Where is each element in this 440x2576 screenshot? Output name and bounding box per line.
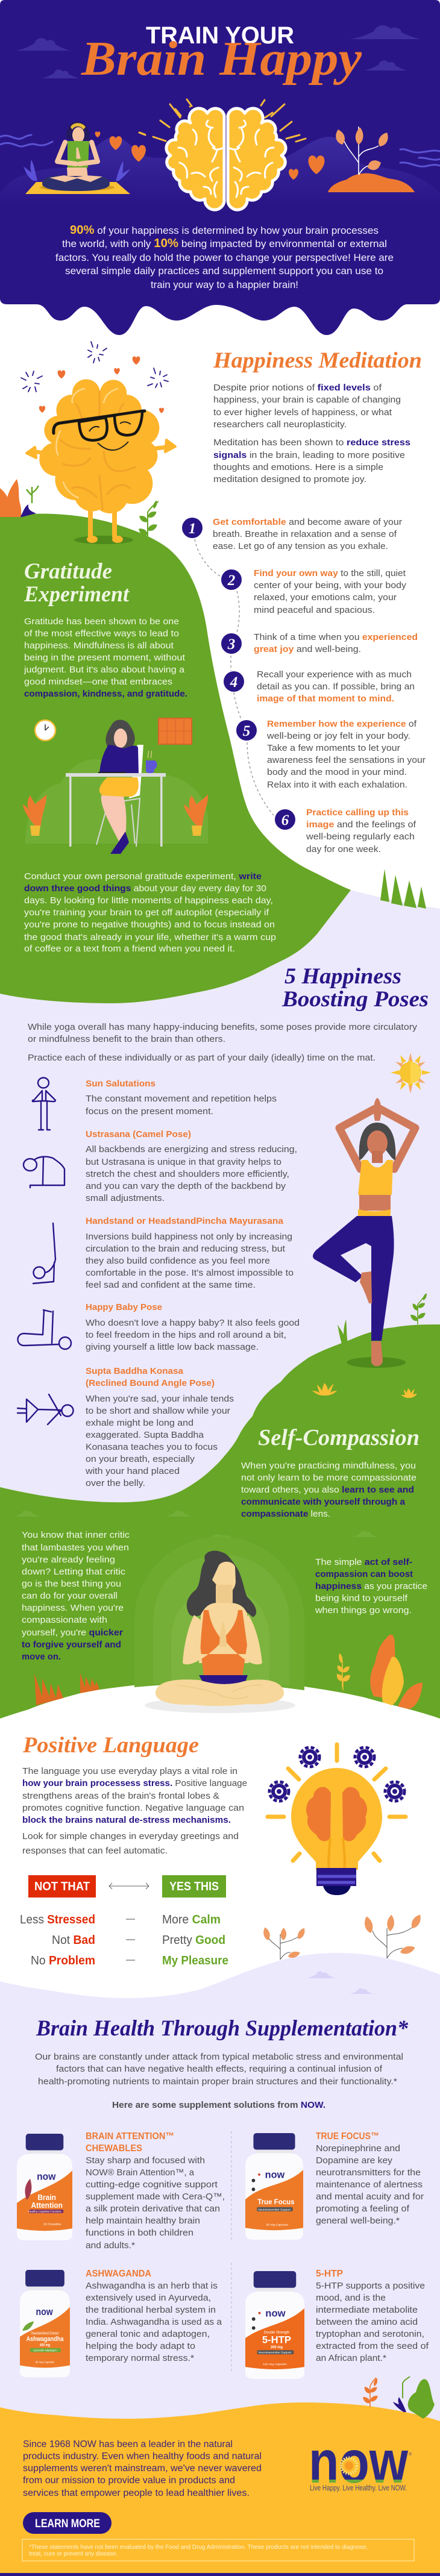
product bottle: Ashwagandha: Ayurvedic Adaptogen bbox=[33, 2349, 57, 2352]
step 4: detail as you can. If possible, bring an bbox=[257, 682, 415, 692]
product bottle: True Focus: Neurotransmitter Support bbox=[258, 2208, 291, 2211]
text: Brain Attention: cutting-edge cognitive support bbox=[86, 2180, 218, 2190]
icon: happy baby pose bbox=[18, 1310, 71, 1349]
text: 5-HTP: 5-HTP supports a positive bbox=[316, 2281, 425, 2291]
illustration: meditating woman with halo bbox=[134, 1537, 304, 1713]
pose: Sun Salutations: focus on the present moment. bbox=[86, 1106, 213, 1117]
text: inner critic: can do for your overall bbox=[22, 1591, 118, 1601]
heading: 5 Happiness Boosting Poses: Boosting Poses bbox=[281, 987, 429, 1012]
product bottle: 5-HTP: 120 Veg Capsules bbox=[263, 2363, 287, 2366]
text: Brain Attention: supplement made with Cera-Q™, bbox=[86, 2192, 225, 2202]
dividers bbox=[231, 2131, 232, 2373]
text: meditation intro: researchers call neuroplasticity. bbox=[213, 419, 347, 430]
heading: Gratitude Experiment bbox=[24, 559, 130, 607]
table: phrase swaps: My Pleasure bbox=[162, 1954, 228, 1967]
text: NOW company description: from our mission to provide value in products and bbox=[23, 2475, 235, 2486]
text: True Focus bbox=[316, 2131, 424, 2226]
pose: Supta Baddha Konasa: Supta Baddha Konasa bbox=[86, 1366, 184, 1376]
icon: camel pose bbox=[24, 1157, 64, 1188]
text: inner critic: down? Letting that critic bbox=[22, 1567, 126, 1577]
label: NOT THAT bbox=[28, 1875, 96, 1898]
panel: footer yellow background bbox=[0, 2402, 440, 2573]
step 3: 3 bbox=[227, 636, 235, 653]
text: supplementation intro: Here are some supplement solutions from NOW. bbox=[112, 2100, 325, 2110]
heading: Self-Compassion: Self-Compassion bbox=[258, 1425, 420, 1450]
heading: Positive Language: Positive Language bbox=[22, 1733, 199, 1758]
step 6: well-being regularly each bbox=[306, 832, 415, 842]
text: True Focus: Norepinephrine and bbox=[316, 2143, 400, 2154]
text: positive language body: promotes cognitive function. Negative language can bbox=[22, 1803, 244, 1813]
text: gratitude intro bbox=[24, 616, 187, 699]
product bottle: Ashwagandha: 450 mg bbox=[40, 2343, 50, 2348]
text: gratitude experiment: you're training your brain to get off autopilot (especially if bbox=[24, 907, 269, 918]
table: phrase swaps: Less Stressed bbox=[20, 1913, 95, 1926]
intro text: train your way to a happier brain! bbox=[151, 279, 298, 290]
product bottle: True Focus bbox=[245, 2133, 303, 2240]
step 6: day for one week. bbox=[306, 844, 381, 854]
step 2: mind peaceful and spacious. bbox=[254, 605, 375, 615]
step 3 bbox=[221, 632, 418, 654]
heading: Gratitude Experiment: Gratitude bbox=[24, 559, 112, 584]
step 5: Take a few moments to let your bbox=[267, 743, 400, 753]
heading: 5 Happiness Boosting Poses: 5 Happiness bbox=[284, 964, 401, 989]
pose: Supta Baddha Konasa: When you're sad, your inhale tends bbox=[86, 1394, 234, 1404]
product bottle: True Focus: now bbox=[265, 2170, 284, 2181]
pose: Happy Baby: giving yourself a little low back massage. bbox=[86, 1342, 259, 1352]
text: meditation intro: thoughts and emotions. Here is a simple bbox=[213, 462, 383, 472]
product bottle: Brain Attention: 60 Chewables bbox=[43, 2222, 61, 2226]
text: True Focus: and mental acuity and for bbox=[316, 2192, 424, 2202]
text: gratitude experiment: the good that's already in your life, whether it's a warm cup bbox=[24, 932, 276, 942]
product bottle: 5-HTP bbox=[245, 2271, 304, 2379]
text: inner critic: compassionate with bbox=[22, 1615, 107, 1625]
text: NOW company description: supplements weren't mainstream, we've never wavered bbox=[23, 2463, 262, 2474]
intro text: 90% of your happiness is determined by how your brain processes bbox=[70, 224, 379, 237]
text: yoga intro: or mindfulness benefit to the brain than others. bbox=[28, 1034, 225, 1044]
text: gratitude experiment: Conduct your own personal gratitude experiment, write bbox=[24, 871, 262, 882]
text: inner critic: to forgive yourself and bbox=[22, 1640, 121, 1650]
text: gratitude experiment: days. By looking for little moments of happiness each day, bbox=[24, 895, 273, 906]
text: gratitude intro: compassion, kindness, and gratitude. bbox=[24, 689, 187, 699]
text: act of self-compassion: being kind to yourself bbox=[315, 1593, 408, 1603]
step 1: breath. Breathe in relaxation and a sense of bbox=[213, 529, 397, 539]
product bottle: Ashwagandha: Standardized Extract bbox=[31, 2332, 59, 2336]
text: supplementation intro: health-promoting nutrients to maintain proper brain structures and their functionality.* bbox=[38, 2076, 397, 2087]
text: meditation intro: to ever higher levels of happiness, or what bbox=[213, 407, 392, 418]
text: Ashwaganda: extensively used in Ayurveda, bbox=[86, 2293, 211, 2303]
pose: Sun Salutations: The constant movement and repetition helps bbox=[86, 1094, 277, 1104]
text: 5-HTP: extracted from the seed of bbox=[316, 2341, 429, 2351]
icon: standing prayer pose bbox=[33, 1077, 55, 1130]
step 5: awareness feel the sensations in your bbox=[267, 755, 426, 765]
text: self-compassion intro: not only learn to be more compassionate bbox=[241, 1473, 416, 1483]
product bottle: 5-HTP: Neurotransmitter Support bbox=[259, 2351, 292, 2355]
step 2 bbox=[221, 568, 407, 615]
intro text: several simple daily practices and supplement support you can use to bbox=[65, 265, 383, 277]
text: gratitude intro: judgment. But it's also about having a bbox=[24, 665, 185, 675]
text: self-compassion intro bbox=[241, 1461, 416, 1519]
icon: hearts in header bbox=[95, 131, 324, 180]
text: Ashwaganda: the traditional herbal system in bbox=[86, 2305, 216, 2315]
text: gratitude intro: being in the present moment, without bbox=[24, 653, 186, 663]
disclaimer box: treat, cure or prevent any disease. bbox=[29, 2550, 118, 2557]
text: yoga intro: Practice each of these individually or as part of your daily (ideally) time on the mat. bbox=[28, 1053, 376, 1063]
arrow: double arrow bbox=[109, 1883, 149, 1889]
text: act of self-compassion: when things go wrong. bbox=[315, 1605, 412, 1615]
label: YES THIS bbox=[162, 1875, 226, 1898]
product bottle: Brain Attention bbox=[17, 2134, 72, 2240]
step 6: Practice calling up this bbox=[306, 807, 409, 818]
text: Brain Attention bbox=[86, 2131, 225, 2251]
heading: Happiness Meditation: Happiness Meditation bbox=[213, 348, 422, 373]
product bottle: 5-HTP: Double Strength bbox=[264, 2331, 289, 2334]
text: yoga intro: While yoga overall has many happy-inducing benefits, some poses provide more circulatory bbox=[28, 1022, 418, 1032]
text: gratitude experiment: of coffee or a text from a friend when you need it. bbox=[24, 944, 235, 954]
text: inner critic: that lambastes you when bbox=[22, 1543, 129, 1553]
text: meditation intro: Meditation has been shown to reduce stress bbox=[213, 437, 410, 448]
pose: Happy Baby: Who doesn't love a happy baby? It also feels good bbox=[86, 1318, 300, 1328]
icon: autumn leaves right bbox=[335, 1635, 423, 1709]
text: Ashwaganda: general tonic and adaptogen, bbox=[86, 2329, 210, 2339]
text: inner critic: You know that inner critic bbox=[22, 1530, 130, 1540]
icon: plants around brain character bbox=[0, 479, 159, 537]
step 6: 6 bbox=[281, 812, 289, 829]
icon: smiling brain character bbox=[21, 342, 175, 544]
product bottle: True Focus: True Focus bbox=[257, 2198, 295, 2206]
pose: Happy Baby: Happy Baby Pose bbox=[86, 1302, 162, 1312]
pose: Handstand: feel sad and confident at the same time. bbox=[86, 1280, 256, 1290]
heading: Gratitude Experiment: Experiment bbox=[24, 582, 130, 607]
text: True Focus: promoting a feeling of bbox=[316, 2204, 410, 2214]
text: meditation intro: signals in the brain, leading to more positive bbox=[213, 450, 405, 460]
text: Ashwaganda: Ashwagandha is an herb that is bbox=[86, 2281, 218, 2291]
pose: Ustrasana bbox=[86, 1129, 297, 1203]
text: meditation intro: happiness, your brain is capable of changing bbox=[213, 395, 401, 405]
text: Brain Attention: BRAIN ATTENTION™ bbox=[86, 2131, 174, 2142]
product bottle: Brain Attention: Healthy Cognitive Function bbox=[28, 2210, 61, 2214]
text: positive language body: responses that can feel automatic. bbox=[22, 1846, 168, 1856]
pose: Ustrasana: stretch the chest and shoulders more efficiently, bbox=[86, 1169, 289, 1179]
step 3: Think of a time when you experienced bbox=[254, 632, 418, 642]
text: Brain Attention: a silk protein derivative that can bbox=[86, 2204, 220, 2214]
icon: yellow flowers bbox=[312, 1383, 417, 1398]
text: supplementation intro: Our brains are constantly under attack from typical metabolic stress and environmental bbox=[35, 2052, 403, 2062]
text: gratitude intro: of the most effective ways to lead to bbox=[24, 628, 179, 639]
step 6: image and the feelings of bbox=[306, 819, 416, 830]
text: yoga intro bbox=[28, 1022, 418, 1063]
disclaimer box bbox=[22, 2539, 414, 2561]
intro text: the world, with only 10% being impacted by environmental or external bbox=[62, 237, 387, 250]
logo: NOW: ® bbox=[409, 2452, 412, 2457]
dashed connector between steps bbox=[195, 539, 274, 815]
text: True Focus: neurotransmitters for the bbox=[316, 2167, 421, 2178]
footer strip bbox=[0, 2573, 440, 2576]
text: act of self-compassion bbox=[315, 1557, 427, 1615]
text: meditation intro: meditation designed to promote joy. bbox=[213, 474, 366, 484]
pose: Supta Baddha Konasa: exaggerated. Supta Baddha bbox=[86, 1430, 204, 1440]
panel: self-compassion green hill bbox=[0, 1324, 440, 1719]
text: 5-HTP: tryptophan and serotonin, bbox=[316, 2329, 424, 2339]
icon: green trees bbox=[380, 869, 426, 909]
pose: Supta Baddha Konasa: to be short and shallow while your bbox=[86, 1406, 230, 1416]
text: meditation intro: Despite prior notions of fixed levels of bbox=[213, 383, 382, 393]
step 1: Get comfortable and become aware of your bbox=[213, 517, 402, 527]
text: gratitude intro: good mindset—one that embraces bbox=[24, 677, 172, 687]
text: Brain Attention: Stay sharp and focused with bbox=[86, 2155, 205, 2166]
title: TRAIN YOUR bbox=[146, 22, 294, 49]
pose: Supta Baddha Konasa: with your hand placed bbox=[85, 1466, 180, 1476]
text: positive language body: how your brain processess stress. Positive language bbox=[22, 1778, 247, 1788]
text: inner critic: you're already feeling bbox=[22, 1555, 115, 1565]
pose: Happy Baby: to feel freedom in the hips and roll around a bit, bbox=[86, 1330, 286, 1340]
text: positive language body: Look for simple changes in everyday greetings and bbox=[22, 1831, 239, 1841]
icon: sun bbox=[391, 1053, 431, 1094]
pose: Handstand: they also build confidence as you feel more bbox=[86, 1256, 270, 1266]
step 3: great joy and well-being. bbox=[254, 644, 361, 654]
text: True Focus: TRUE FOCUS™ bbox=[316, 2131, 379, 2142]
step 5: body and the mood in your mind. bbox=[267, 767, 407, 777]
label: YES THIS: YES THIS bbox=[169, 1880, 219, 1893]
icon: reclined bound angle pose bbox=[17, 1394, 74, 1424]
text: Ashwaganda bbox=[86, 2269, 222, 2363]
text: NOW company description: services that empower people to lead healthier lives. bbox=[23, 2488, 250, 2498]
icon: lightbulb with brain and gears bbox=[268, 1744, 406, 1895]
table: phrase swaps bbox=[20, 1913, 228, 1967]
disclaimer box: *These statements have not been evaluated by the Food and Drug Administration. These products are not intended to diagnose, bbox=[29, 2543, 368, 2551]
logo: NOW: Live Happy. Live Healthy. Live NOW. bbox=[310, 2483, 407, 2492]
step 5: well-being or joy felt in your body. bbox=[266, 731, 410, 741]
logo: NOW: now bbox=[309, 2428, 408, 2496]
pose: Sun Salutations bbox=[86, 1079, 277, 1117]
text: meditation intro bbox=[213, 383, 410, 484]
pose: Handstand: Inversions build happiness not only by increasing bbox=[86, 1232, 292, 1242]
text: 5-HTP: mood, and is the bbox=[316, 2293, 386, 2303]
text: True Focus: Dopamine are key bbox=[316, 2155, 393, 2166]
product bottle: Brain Attention: Attention bbox=[31, 2201, 63, 2210]
illustration: woman writing at desk bbox=[23, 718, 208, 854]
text: Ashwaganda: ASHWAGANDA bbox=[86, 2269, 151, 2279]
text: self-compassion intro: toward others, you also learn to see and bbox=[241, 1485, 414, 1495]
text: 5-HTP: intermediate metabolite bbox=[316, 2305, 418, 2315]
product bottle: Ashwagandha: Ashwagandha bbox=[27, 2336, 64, 2343]
step 2: Find your own way to the still, quiet bbox=[254, 568, 406, 578]
text: act of self-compassion: happiness as you practice bbox=[315, 1581, 427, 1591]
step 4 bbox=[224, 669, 415, 704]
text: gratitude intro: happiness. Mindfulness is all about bbox=[24, 641, 174, 651]
text: Brain Attention: NOW® Brain Attention™, a bbox=[86, 2167, 195, 2178]
text: Ashwaganda: temporary normal stress.* bbox=[86, 2353, 194, 2363]
text: gratitude intro: Gratitude has been shown to be one bbox=[24, 616, 179, 627]
panel: header background bbox=[0, 0, 440, 335]
text: positive language body: strengthens areas of the brain's frontal lobes & bbox=[22, 1791, 219, 1801]
text: positive language body: block the brains natural de-stress mechanisms. bbox=[22, 1815, 231, 1825]
icon: meditating woman on mat bbox=[24, 122, 131, 194]
text: gratitude experiment: down three good things about your day every day for 30 bbox=[24, 883, 266, 894]
table: phrase swaps: No Problem bbox=[31, 1954, 95, 1967]
text: 5-HTP bbox=[316, 2269, 429, 2363]
step 5: 5 bbox=[243, 723, 250, 739]
pose: Supta Baddha Konasa: on your breath, especially bbox=[86, 1454, 195, 1464]
step 1: 1 bbox=[189, 521, 196, 537]
text: act of self-compassion: The simple act of self- bbox=[315, 1557, 412, 1567]
product bottle: Ashwagandha: now bbox=[36, 2307, 54, 2318]
pose: Ustrasana: Ustrasana (Camel Pose) bbox=[86, 1129, 191, 1139]
icon: handstand pose bbox=[33, 1223, 55, 1283]
text: Ashwaganda: helping the body adapt to bbox=[86, 2341, 195, 2351]
illustration: woman in tree pose bbox=[312, 1098, 428, 1395]
pose: Supta Baddha Konasa: (Reclined Bound Angle Pose) bbox=[86, 1378, 215, 1388]
step 2: 2 bbox=[227, 572, 235, 589]
text: 5-HTP: between the amino acid bbox=[316, 2317, 418, 2327]
product bottle: True Focus: 90 Veg Capsules bbox=[266, 2223, 288, 2227]
step 5: Remember how the experience of bbox=[267, 719, 417, 729]
text: inner critic bbox=[22, 1530, 130, 1662]
pose: Handstand: circulation to the brain and reducing stress, but bbox=[86, 1244, 286, 1254]
step 1: ease. Let go of any tension as you exhale. bbox=[213, 541, 388, 551]
text: NOW company description: Since 1968 NOW has been a leader in the natural bbox=[23, 2439, 233, 2449]
text: supplementation intro: factors that can have negative health effects, requiring a continual infusion of bbox=[56, 2064, 383, 2074]
text: 5-HTP: an African plant.* bbox=[316, 2353, 386, 2363]
product bottle: Brain Attention: now bbox=[37, 2171, 56, 2183]
text: self-compassion intro: compassionate lens. bbox=[241, 1509, 330, 1519]
button: learn more: LEARN MORE bbox=[35, 2518, 100, 2530]
button: learn more bbox=[23, 2512, 112, 2534]
step 6 bbox=[275, 807, 416, 854]
intro text: factors. You really do hold the power to change your perspective! Here are bbox=[55, 252, 394, 263]
intro text bbox=[55, 224, 394, 290]
pose: Handstand: comfortable in the pose. It's almost impossible to bbox=[86, 1268, 294, 1278]
heading: 5 Happiness Boosting Poses bbox=[281, 964, 429, 1012]
text: True Focus: maintenance of alertness bbox=[316, 2180, 423, 2190]
text: Brain Attention: CHEWABLES bbox=[86, 2143, 142, 2154]
pose: Handstand bbox=[86, 1216, 294, 1290]
text: NOW company description bbox=[23, 2439, 262, 2498]
table: phrase swaps: Not Bad bbox=[52, 1934, 95, 1947]
pose: Sun Salutations: Sun Salutations bbox=[86, 1079, 156, 1089]
text: inner critic: move on. bbox=[22, 1652, 61, 1662]
icon: plant on mound bbox=[328, 127, 415, 192]
text: act of self-compassion: compassion can boost bbox=[315, 1569, 413, 1579]
pose: Ustrasana: and you can vary the depth of the backbend by bbox=[86, 1181, 286, 1191]
panel: supplement lavender background bbox=[0, 1953, 440, 2422]
text: inner critic: go is the best thing you bbox=[22, 1579, 121, 1589]
pose: Supta Baddha Konasa: over the belly. bbox=[86, 1478, 145, 1488]
text: 5-HTP: 5-HTP bbox=[316, 2269, 343, 2279]
step 5: Relax into it with each exhalation. bbox=[267, 780, 407, 790]
pose: Handstand: Handstand or HeadstandPincha Mayurasana bbox=[86, 1216, 284, 1226]
table: phrase swaps: Pretty Good bbox=[162, 1934, 225, 1947]
text: Brain Attention: functions in both children bbox=[86, 2228, 193, 2238]
text: Brain Attention: and adults.* bbox=[86, 2240, 135, 2251]
product bottle: Ashwagandha: 90 Veg Capsules bbox=[36, 2360, 55, 2364]
text: supplementation intro bbox=[35, 2052, 403, 2110]
text: self-compassion intro: When you're practicing mindfulness, you bbox=[241, 1461, 416, 1471]
pose: Ustrasana: All backbends are energizing and stress reducing, bbox=[86, 1144, 297, 1155]
step 5 bbox=[236, 719, 426, 790]
step 1 bbox=[182, 517, 402, 551]
text: gratitude experiment: you're prone to negative thoughts) and to focus instead on bbox=[24, 920, 275, 930]
icon: central brain with rays bbox=[139, 99, 306, 210]
heading: Brain Health Through Supplementation: Brain Health Through Supplementation* bbox=[36, 2016, 408, 2041]
text: True Focus: general well-being.* bbox=[316, 2216, 400, 2226]
pose: Ustrasana: small adjustments. bbox=[86, 1193, 165, 1203]
product bottle: 5-HTP: 5-HTP bbox=[262, 2334, 291, 2345]
text: Ashwaganda: India. Ashwagandha is used as a bbox=[86, 2317, 222, 2327]
title: Brain Happy bbox=[81, 33, 362, 86]
panel: lavender poses background bbox=[0, 886, 440, 1506]
table: phrase swaps: More Calm bbox=[162, 1913, 221, 1926]
step 4: image of that moment to mind. bbox=[257, 694, 394, 704]
pose: Supta Baddha Konasa: Konasana teaches you to focus bbox=[86, 1442, 218, 1452]
label: NOT THAT: NOT THAT bbox=[34, 1880, 90, 1893]
pose: Happy Baby bbox=[86, 1302, 300, 1352]
text: gratitude experiment bbox=[24, 871, 276, 954]
product bottle: 5-HTP: 200 mg bbox=[271, 2346, 283, 2349]
pose: Supta Baddha Konasa: exhale might be long and bbox=[86, 1418, 193, 1428]
product bottle: Ashwagandha bbox=[20, 2270, 70, 2377]
text: inner critic: happiness. When you're bbox=[22, 1603, 124, 1613]
icon: orange grass bbox=[34, 1673, 99, 1705]
pose: Supta Baddha Konasa bbox=[85, 1366, 234, 1488]
icon: plants on lavender hill bbox=[262, 1913, 423, 1994]
text: self-compassion intro: communicate with yourself through a bbox=[241, 1497, 406, 1507]
product bottle: Brain Attention: Brain bbox=[37, 2193, 56, 2202]
step 4: 4 bbox=[230, 674, 237, 691]
text: positive language body: The language you use everyday plays a vital role in bbox=[22, 1766, 237, 1776]
pose: Ustrasana: but Ustrasana is unique in that gravity helps to bbox=[86, 1157, 281, 1167]
text: positive language body bbox=[22, 1766, 247, 1856]
step 2: relaxed, your emotions calm, your bbox=[254, 592, 397, 603]
decorative clouds on green bbox=[13, 1511, 379, 1540]
text: inner critic: yourself, you're quicker bbox=[22, 1628, 123, 1638]
panel: gratitude green hill bbox=[0, 514, 351, 1003]
text: Brain Attention: help maintain healthy brain bbox=[86, 2216, 200, 2226]
product bottle: 5-HTP: now bbox=[265, 2307, 286, 2319]
step 4: Recall your experience with as much bbox=[257, 669, 412, 680]
icon: plants above footer bbox=[362, 2377, 435, 2419]
step 2: center of your being, with your body bbox=[254, 580, 407, 591]
text: NOW company description: products industry. Even when healthy foods and natural bbox=[23, 2451, 262, 2462]
